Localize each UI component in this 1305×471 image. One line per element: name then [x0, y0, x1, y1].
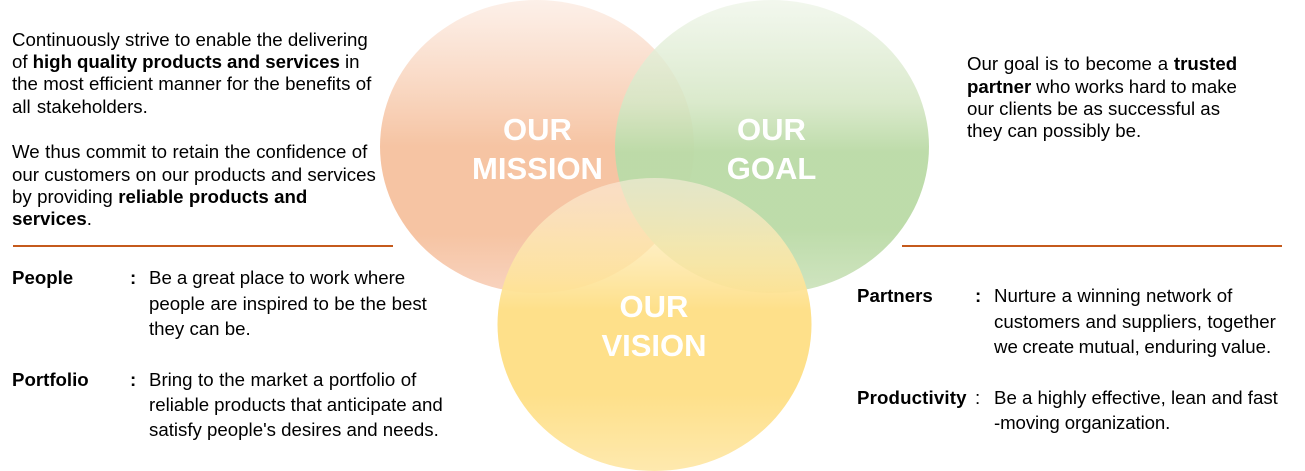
- text block: mission statement: all stakeholders.: [12, 96, 148, 117]
- label: our goal: OUR: [737, 112, 806, 147]
- text block: goal statement: they can possibly be.: [967, 120, 1141, 141]
- value: partners: Partners: [857, 285, 933, 306]
- value: partners: customers and suppliers, together: [994, 311, 1276, 332]
- value: productivity: Be a highly effective, lean and fast: [994, 387, 1278, 408]
- text block: mission statement: [12, 29, 376, 229]
- value: productivity: [857, 387, 1278, 433]
- text block: mission statement: We thus commit to retain the confidence of: [12, 141, 367, 162]
- divider: left: [13, 245, 393, 247]
- text block: goal statement: partner who works hard to make: [967, 76, 1237, 97]
- value: partners: :: [975, 285, 981, 306]
- value: portfolio: [12, 369, 443, 440]
- text block: mission statement: Continuously strive to enable the delivering: [12, 29, 368, 50]
- value: partners: [857, 285, 1276, 357]
- value: portfolio: :: [130, 369, 136, 390]
- label: our mission: MISSION: [472, 151, 603, 186]
- value: people: people are inspired to be the best: [149, 293, 427, 314]
- text block: mission statement: by providing reliable products and: [12, 186, 307, 207]
- value: portfolio: satisfy people's desires and needs.: [149, 419, 439, 440]
- circle: our mission: [380, 0, 694, 293]
- text block: mission statement: services.: [12, 208, 92, 229]
- value: productivity: -moving organization.: [994, 412, 1170, 433]
- label: our vision: [601, 289, 707, 363]
- divider: right: [902, 245, 1282, 247]
- value: productivity: :: [975, 387, 980, 408]
- value: partners: we create mutual, enduring value.: [994, 336, 1271, 357]
- value: people: [12, 267, 427, 339]
- circle: our vision: [498, 178, 812, 471]
- value: portfolio: Bring to the market a portfolio of: [149, 369, 416, 390]
- label: our goal: GOAL: [727, 151, 816, 186]
- label: our mission: OUR: [503, 112, 572, 147]
- label: our vision: VISION: [601, 328, 707, 363]
- value: people: :: [130, 267, 136, 288]
- text block: goal statement: Our goal is to become a trusted: [967, 53, 1237, 74]
- value: partners: Nurture a winning network of: [994, 285, 1232, 306]
- circle: our goal: [615, 0, 929, 293]
- value: people: Be a great place to work where: [149, 267, 405, 288]
- label: our mission: [472, 112, 603, 186]
- text block: goal statement: our clients be as successful as: [967, 98, 1220, 119]
- value: productivity: Productivity: [857, 387, 967, 408]
- label: our goal: [727, 112, 816, 186]
- text block: goal statement: [967, 53, 1237, 141]
- text block: mission statement: of high quality products and services in: [12, 51, 359, 72]
- value: portfolio: reliable products that anticipate and: [149, 394, 443, 415]
- text block: mission statement: our customers on our products and services: [12, 164, 376, 185]
- label: our vision: OUR: [620, 289, 688, 324]
- value: people: they can be.: [149, 318, 251, 339]
- value: portfolio: Portfolio: [12, 369, 89, 390]
- value: people: People: [12, 267, 73, 288]
- text block: mission statement: the most efficient manner for the benefits of: [12, 73, 371, 94]
